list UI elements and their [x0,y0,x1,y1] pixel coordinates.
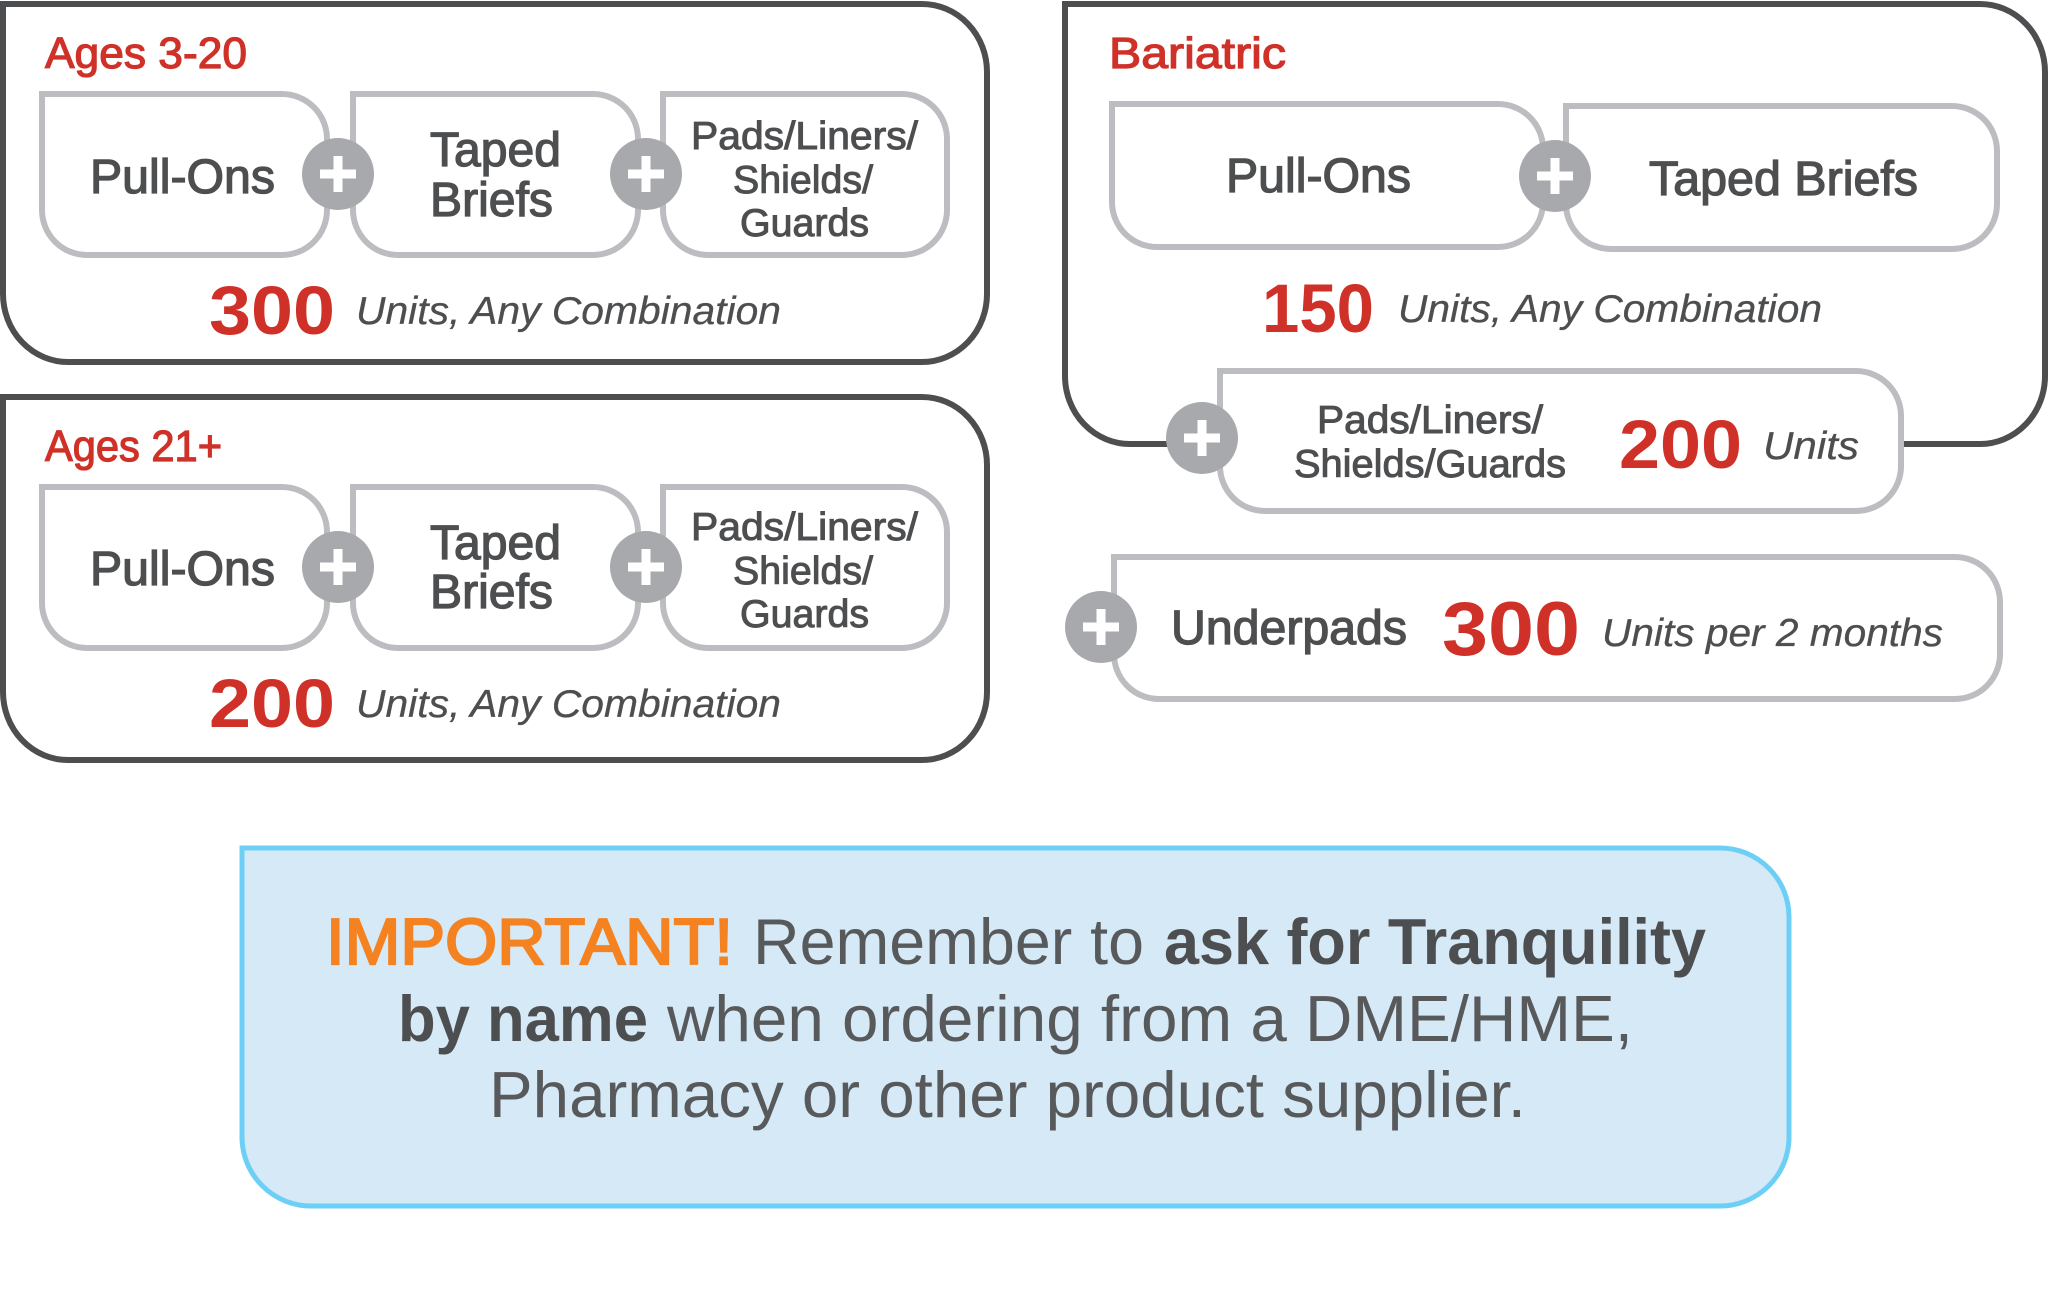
box: underpads: 300 [1442,587,1580,672]
box: underpads: Underpads [1171,602,1407,655]
box: pads liners shields guards [663,487,947,648]
box: pads liners shields guards 200 units: Shields/Guards [1294,443,1566,486]
figure: 300 units: Units, Any Combination [356,290,781,333]
box: pads liners shields guards 200 units: Pads/Liners/ [1317,399,1543,442]
callout: important: Pharmacy or other product supplier. [489,1058,1526,1131]
icon: plus [302,531,374,603]
callout: important: Remember to [753,905,1144,978]
callout: important: by name [398,982,648,1055]
box: pads liners shields guards: Guards [740,593,869,636]
icon: plus [302,138,374,210]
figure: 150 units [1262,270,1822,347]
box: taped briefs: Taped [430,124,561,177]
box: pull-ons [42,487,327,648]
heading: ages 3-20: Ages 3-20 [45,29,247,78]
box: pads liners shields guards [663,94,947,255]
box: taped briefs: Taped [430,517,561,570]
box: pads liners shields guards: Shields/ [733,550,873,593]
box: pull-ons [42,94,327,255]
box: pull-ons: Pull-Ons [90,543,275,596]
figure: 300 units: 300 [209,272,335,349]
icon: plus [1065,591,1137,663]
figure: 150 units: 150 [1262,270,1374,347]
icon: plus [1519,140,1591,212]
box: pads liners shields guards: Guards [740,202,869,245]
box: pull-ons: Pull-Ons [90,151,275,204]
box: underpads [1065,557,2000,699]
figure: 150 units: Units, Any Combination [1398,288,1822,331]
box: taped briefs [353,94,638,255]
box: pull-ons: Pull-Ons [1226,150,1411,203]
figure: 200 units [209,665,781,742]
figure: 200 units: 200 [209,665,335,742]
heading: bariatric: Bariatric [1109,29,1286,78]
panel: ages 21+ [3,397,987,760]
icon: plus [610,138,682,210]
box: pull-ons [1112,104,1543,247]
box: pads liners shields guards: Pads/Liners/ [691,115,918,158]
box: taped briefs: Briefs [430,566,553,619]
heading: ages 21+: Ages 21+ [45,422,222,471]
icon: plus [1166,402,1238,474]
callout: important: IMPORTANT! [326,905,733,978]
box: taped briefs [1566,106,1997,249]
box: pads liners shields guards: Shields/ [733,159,873,202]
box: taped briefs [353,487,638,648]
panel: ages 3-20 [3,4,987,362]
box: taped briefs: Briefs [430,174,553,227]
panel: bariatric [1065,4,2045,511]
box: pads liners shields guards 200 units: 200 [1619,406,1742,483]
box: pads liners shields guards 200 units: Units [1763,425,1859,468]
box: pads liners shields guards 200 units [1220,371,1901,511]
callout: important: when ordering from a DME/HME, [666,982,1633,1055]
callout: important [242,848,1789,1206]
box: underpads: Units per 2 months [1602,612,1943,655]
box: pads liners shields guards: Pads/Liners/ [691,506,918,549]
figure: 200 units: Units, Any Combination [356,683,781,726]
callout: important: ask for Tranquility [1164,905,1706,978]
icon: plus [610,531,682,603]
box: taped briefs: Taped Briefs [1649,153,1918,206]
figure: 300 units [209,272,781,349]
